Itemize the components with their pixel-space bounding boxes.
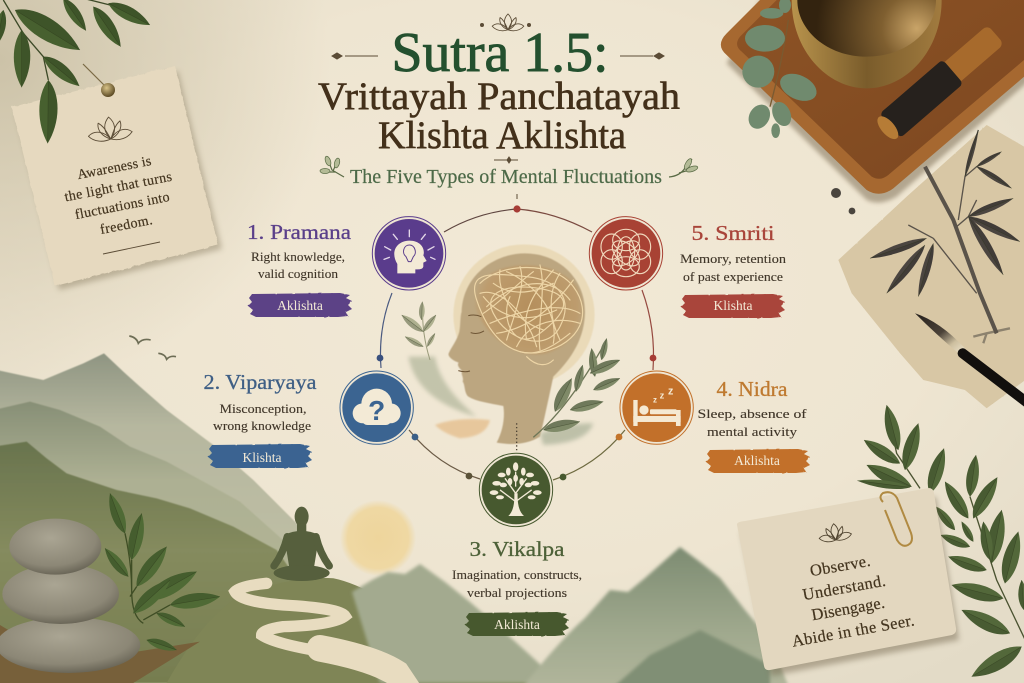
- ink dots: [831, 188, 855, 214]
- foreground hill: [167, 578, 540, 683]
- node 1: Pramana icon: [372, 217, 446, 290]
- quote: fluctuations into: [74, 190, 171, 223]
- note: awareness: [12, 64, 222, 290]
- mallet: [872, 22, 1006, 144]
- card text: Understand.: [801, 571, 887, 604]
- label: 1. Pramana: Aklishta: [277, 298, 323, 313]
- winding path: [235, 583, 410, 683]
- title ornament: lotus: [480, 14, 531, 31]
- title: Vrittayah Panchatayah: [318, 75, 680, 118]
- label: 2. Viparyaya: 2. Viparyaya: [204, 370, 317, 394]
- tangled thoughts: [475, 265, 583, 365]
- subtitle with sprigs: [320, 155, 698, 188]
- stone stack with leaves: [0, 491, 221, 683]
- label: 4. Nidra: 4. Nidra: [716, 377, 788, 401]
- label: 3. Vikalpa: Imagination, constructs,: [452, 568, 582, 582]
- title: [318, 22, 680, 157]
- birds: [129, 336, 176, 359]
- label: 1. Pramana: Right knowledge,: [251, 250, 345, 264]
- brush: [915, 313, 1024, 407]
- card text: Abide in the Seer.: [790, 610, 916, 651]
- label: 3. Vikalpa: verbal projections: [467, 586, 567, 600]
- brain shade: [475, 265, 582, 354]
- label: 2. Viparyaya: [204, 370, 317, 468]
- eucalyptus sprig: [742, 0, 821, 138]
- label: 5. Smriti: [680, 221, 787, 318]
- label: 3. Vikalpa: 3. Vikalpa: [470, 537, 565, 561]
- central head illustration: [399, 244, 622, 452]
- node 2: Viparyaya icon: ?: [368, 395, 385, 426]
- node 5: Smriti icon: [589, 217, 663, 290]
- label: 3. Vikalpa: [452, 537, 582, 636]
- tray with singing bowl: [721, 0, 1024, 203]
- bottom-right leaves: [857, 403, 1024, 683]
- node 2: Viparyaya icon: [340, 371, 413, 444]
- leaf over note: [39, 80, 58, 143]
- quote: the light that turns: [63, 170, 173, 205]
- label: 5. Smriti: of past experience: [683, 270, 783, 284]
- top-left leaves: [0, 0, 153, 91]
- distant hills, lower centre and right: [352, 547, 790, 683]
- label: 4. Nidra: Aklishta: [734, 453, 780, 468]
- card text: Observe.: [808, 551, 872, 580]
- left sprig and wash: [399, 301, 477, 417]
- head silhouette: [448, 253, 585, 444]
- right sprig and wash: [435, 338, 622, 445]
- label: 4. Nidra: mental activity: [707, 425, 798, 439]
- card text: Disengage.: [810, 593, 886, 624]
- lotus icon: [817, 521, 852, 543]
- lotus icon: [87, 115, 133, 143]
- title: Sutra 1.5:: [392, 22, 608, 84]
- node 4: Nidra icon: z: [653, 395, 657, 404]
- label: 2. Viparyaya: Klishta: [242, 450, 282, 465]
- bamboo painting: [838, 125, 1024, 408]
- card text: [790, 551, 916, 651]
- quote: Awareness is: [76, 154, 153, 183]
- label: 1. Pramana: 1. Pramana: [247, 220, 352, 244]
- label: 2. Viparyaya: Misconception,: [220, 402, 306, 416]
- node 4: Nidra icon: z: [668, 386, 673, 398]
- bowl: [792, 0, 942, 88]
- note: observe: [737, 488, 959, 676]
- face details: [458, 315, 484, 372]
- label: 4. Nidra: Sleep, absence of: [698, 407, 808, 421]
- node 3: Vikalpa icon: [479, 453, 553, 527]
- label: 4. Nidra: [698, 377, 810, 473]
- setting sun: [340, 500, 416, 576]
- title flourishes: [332, 53, 664, 199]
- label: 1. Pramana: [247, 220, 352, 317]
- landscape: misty mountains: [0, 353, 540, 683]
- label: 3. Vikalpa: Aklishta: [494, 617, 540, 632]
- pin: [83, 64, 115, 97]
- label: 5. Smriti: 5. Smriti: [692, 221, 775, 245]
- connecting ring: [377, 205, 656, 480]
- quote: [63, 154, 173, 238]
- title: Klishta Aklishta: [378, 114, 626, 157]
- meditating figure: [274, 507, 330, 581]
- subtitle with sprigs: The Five Types of Mental Fluctuations: [350, 167, 662, 188]
- dotted link to Vikalpa: [515, 423, 519, 452]
- node 4: Nidra icon: [620, 371, 693, 444]
- paperclip: [880, 492, 912, 546]
- label: 1. Pramana: valid cognition: [258, 267, 339, 281]
- label: 5. Smriti: Memory, retention: [680, 252, 787, 266]
- label: 5. Smriti: Klishta: [714, 298, 753, 313]
- node 4: Nidra icon: z: [660, 391, 665, 401]
- label: 2. Viparyaya: wrong knowledge: [213, 419, 311, 433]
- quote: freedom.: [99, 213, 154, 238]
